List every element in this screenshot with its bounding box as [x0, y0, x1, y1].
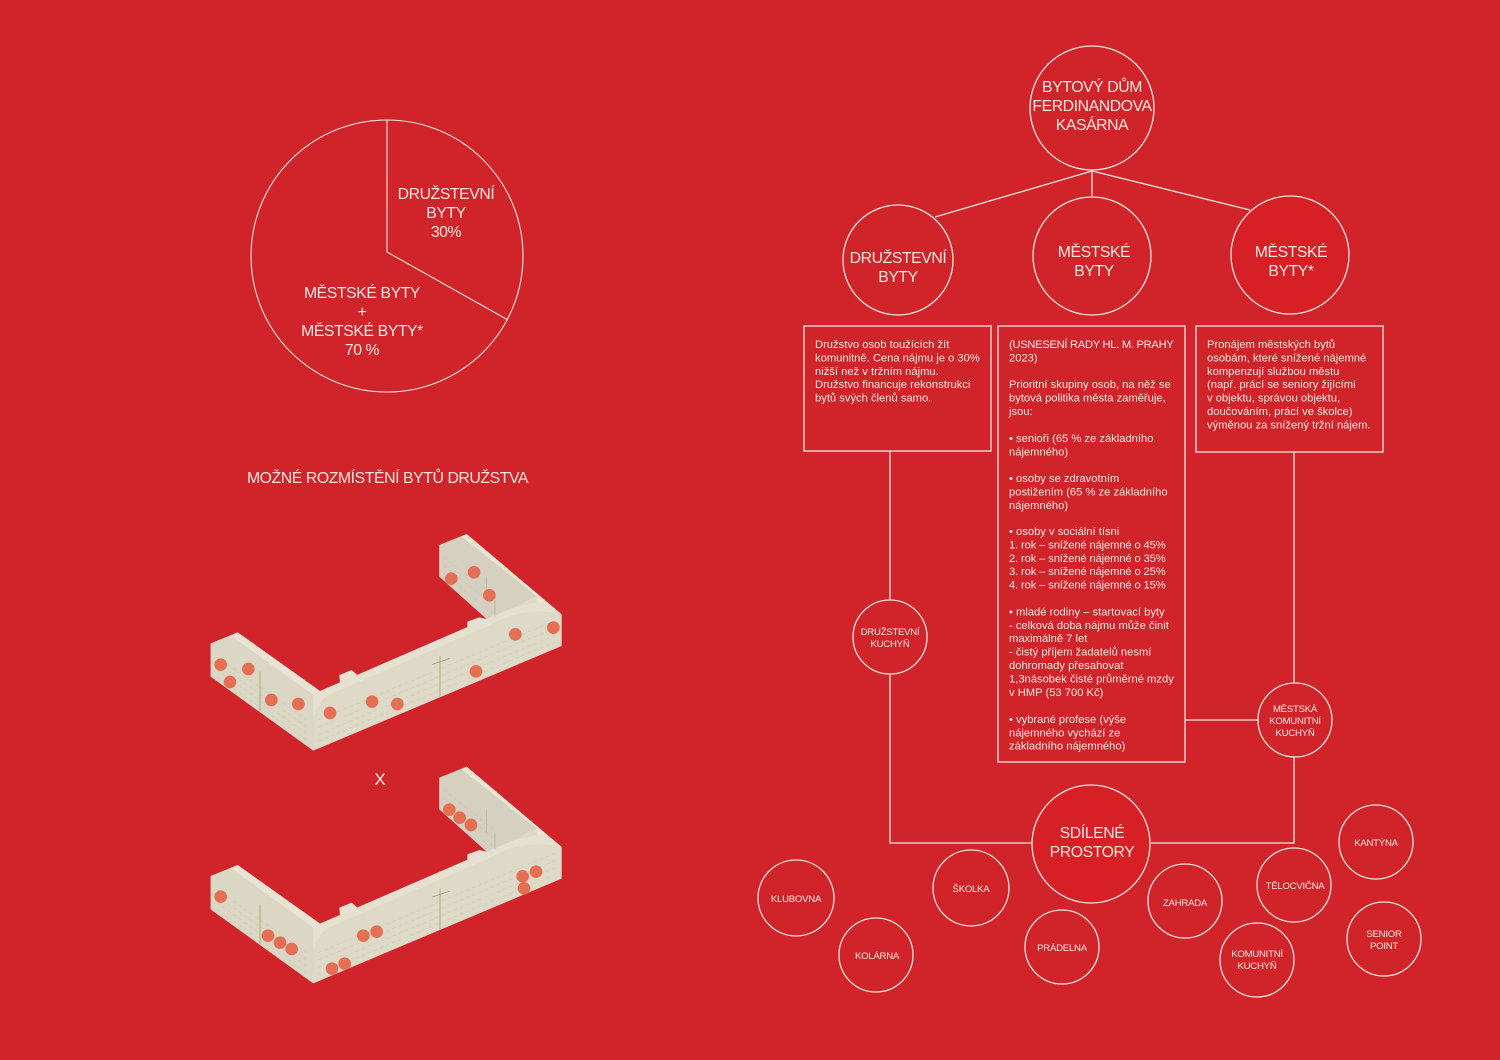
node: družstevní kuchyň	[853, 600, 927, 674]
box: městské byty priority groups: 3. rok – snížené nájemné o 25%	[1009, 566, 1166, 578]
box: městské byty* description: výměnou za snížený tržní nájem.	[1207, 420, 1371, 432]
pie label: družstevní byty 30 %: BYTY	[426, 205, 467, 222]
node: městské byty*: MĚSTSKÉ	[1255, 242, 1327, 261]
node: bytový dům Ferdinandova kasárna: FERDINANDOVA	[1032, 98, 1153, 115]
node: komunitní kuchyň: KUCHYŇ	[1237, 961, 1277, 972]
node: senior point	[1347, 902, 1421, 976]
node: městské byty*: BYTY*	[1268, 263, 1314, 280]
box: městské byty priority groups: bytová politika města zaměřuje,	[1009, 392, 1166, 404]
box: městské byty priority groups: nájemného)	[1009, 446, 1068, 458]
node: družstevní byty: DRUŽSTEVNÍ	[850, 248, 947, 267]
node: městské byty: BYTY	[1074, 263, 1115, 280]
node: senior point: SENIOR	[1366, 929, 1402, 940]
node: městská komunitní kuchyň: KOMUNITNÍ	[1269, 716, 1321, 727]
box: městské byty* description: Pronájem městských bytů	[1207, 339, 1335, 351]
box: městské byty priority groups: 1,3násobek čisté průměrné mzdy	[1009, 674, 1174, 686]
node: tělocvična: TĚLOCVIČNA	[1266, 881, 1325, 892]
box: městské byty priority groups: základního nájemného)	[1009, 740, 1126, 752]
node: zahrada: ZAHRADA	[1163, 898, 1208, 909]
node: komunitní kuchyň	[1220, 923, 1294, 997]
pie label: městské byty 70 %: MĚSTSKÉ BYTY*	[301, 321, 423, 340]
box: družstevní byty description: Družstvo osob toužících žít	[815, 339, 950, 351]
node: sdílené prostory: PROSTORY	[1050, 844, 1135, 861]
node: zahrada	[1148, 864, 1222, 938]
separator: x: X	[374, 770, 386, 789]
node: městské byty*	[1231, 196, 1349, 314]
pie label: městské byty 70 %: 70 %	[345, 342, 380, 359]
box: městské byty priority groups: - celková doba nájmu může činit	[1009, 620, 1170, 632]
node: kantýna	[1339, 805, 1413, 879]
box: městské byty priority groups: • osoby se zdravotním	[1009, 473, 1119, 485]
box: městské byty priority groups: maximálně 7 let	[1009, 633, 1088, 645]
box: městské byty* description: kompenzují službou městu	[1207, 366, 1339, 378]
node: městské byty	[1033, 197, 1151, 315]
box: městské byty priority groups: nájemného)	[1009, 500, 1068, 512]
node: městská komunitní kuchyň: KUCHYŇ	[1275, 728, 1315, 739]
box: družstevní byty description: komunitně. Cena nájmu je o 30%	[815, 352, 980, 364]
pie label: družstevní byty 30 %: DRUŽSTEVNÍ	[398, 184, 495, 203]
pie label: městské byty 70 %: +	[358, 304, 367, 321]
box: městské byty priority groups: (USNESENÍ RADY HL. M. PRAHY	[1009, 338, 1174, 351]
isometric building: placement variant B	[211, 767, 562, 983]
node: kolárna: KOLÁRNA	[855, 951, 900, 962]
box: městské byty priority groups: • mladé rodiny – startovací byty	[1009, 606, 1165, 618]
node: městská komunitní kuchyň: MĚSTSKÁ	[1273, 704, 1318, 715]
node: školka: ŠKOLKA	[953, 884, 990, 895]
isometric building: placement variant A	[211, 534, 562, 751]
node: prádelna	[1025, 910, 1099, 984]
box: městské byty priority groups: • osoby v sociální tísni	[1009, 526, 1119, 538]
node: bytový dům Ferdinandova kasárna: BYTOVÝ DŮM	[1042, 77, 1142, 96]
box: městské byty priority groups: postižením (65 % ze základního	[1009, 486, 1168, 498]
box: městské byty priority groups: v HMP (53 700 Kč)	[1009, 687, 1104, 699]
box: městské byty priority groups: • senioři (65 % ze základního	[1009, 433, 1153, 445]
node: družstevní kuchyň: KUCHYŇ	[870, 639, 910, 650]
box: městské byty priority groups: - čistý příjem žadatelů nesmí	[1009, 646, 1152, 658]
box: městské byty priority groups: nájemného vychází ze	[1009, 728, 1120, 740]
node: prádelna: PRÁDELNA	[1037, 943, 1088, 954]
node: kolárna	[839, 918, 913, 992]
node: sdílené prostory	[1032, 785, 1150, 903]
node: družstevní kuchyň: DRUŽSTEVNÍ	[861, 627, 920, 638]
box: městské byty* description: osobám, které snížené nájemné	[1207, 352, 1366, 364]
node: klubovna	[758, 860, 834, 936]
box: městské byty priority groups: 2. rok – snížené nájemné o 35%	[1009, 553, 1166, 565]
node: bytový dům Ferdinandova kasárna: KASÁRNA	[1056, 115, 1129, 134]
box: městské byty priority groups	[998, 326, 1185, 762]
pie label: městské byty 70 %: MĚSTSKÉ BYTY	[304, 283, 421, 302]
node: sdílené prostory: SDÍLENÉ	[1060, 823, 1124, 842]
heading: possible placement of cooperative flats: MOŽNÉ ROZMÍSTĚNÍ BYTŮ DRUŽSTVA	[247, 468, 529, 487]
box: městské byty priority groups: 1. rok – snížené nájemné o 45%	[1009, 540, 1166, 552]
node: družstevní byty: BYTY	[878, 269, 919, 286]
pie label: družstevní byty 30 %: 30%	[431, 224, 462, 241]
node: školka	[933, 850, 1009, 926]
box: městské byty* description: v objektu, správou objektu,	[1207, 392, 1340, 404]
box: městské byty* description: doučováním, prácí ve školce)	[1207, 406, 1353, 418]
box: družstevní byty description: Družstvo financuje rekonstrukci	[815, 379, 970, 391]
pie chart: housing share	[251, 120, 523, 392]
box: družstevní byty description: nižší než v tržním nájmu.	[815, 366, 939, 378]
box: družstevní byty description	[804, 326, 991, 451]
box: městské byty priority groups: 4. rok – snížené nájemné o 15%	[1009, 580, 1166, 592]
node: klubovna: KLUBOVNA	[771, 894, 822, 905]
node: městská komunitní kuchyň	[1258, 683, 1332, 757]
box: městské byty* description	[1196, 326, 1383, 452]
node: komunitní kuchyň: KOMUNITNÍ	[1231, 949, 1283, 960]
box: městské byty priority groups: dohromady přesahovat	[1009, 660, 1124, 672]
node: bytový dům Ferdinandova kasárna	[1030, 46, 1154, 170]
node: senior point: POINT	[1370, 941, 1398, 952]
box: družstevní byty description: bytů svých členů samo.	[815, 392, 931, 404]
box: městské byty priority groups: Prioritní skupiny osob, na něž se	[1009, 379, 1171, 391]
node: kantýna: KANTÝNA	[1354, 838, 1399, 849]
node: tělocvična	[1257, 848, 1331, 922]
box: městské byty* description: (např. prácí se seniory žijícími	[1207, 379, 1356, 391]
node: družstevní byty	[843, 205, 953, 315]
node: městské byty: MĚSTSKÉ	[1058, 242, 1130, 261]
box: městské byty priority groups: jsou:	[1008, 406, 1033, 418]
box: městské byty priority groups: 2023)	[1009, 352, 1038, 364]
box: městské byty priority groups: • vybrané profese (výše	[1009, 714, 1126, 726]
connector lines	[890, 171, 1294, 843]
